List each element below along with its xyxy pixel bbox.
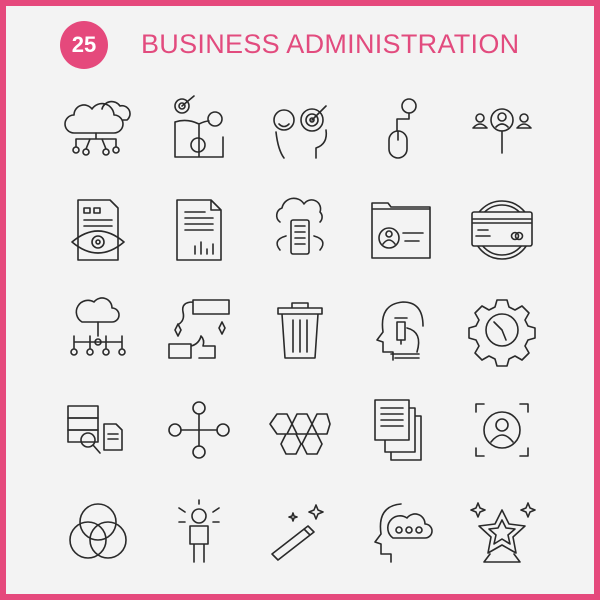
icon: people network: [169, 402, 229, 458]
icon: gear clock: [469, 300, 535, 366]
icon: report doc: [177, 200, 221, 260]
badge: 25: [60, 21, 108, 69]
icon: server search: [68, 406, 122, 453]
icon: hexagons: [270, 414, 330, 454]
icon: cloud phone: [277, 198, 323, 254]
icon: mouse coin: [389, 99, 416, 158]
icon: cloud hierarchy: [71, 298, 125, 355]
icon: head target: [274, 106, 326, 158]
icon: folder contact: [372, 203, 430, 258]
icon: book target: [175, 96, 223, 157]
icon: head cloud: [375, 504, 432, 562]
icon: document eye: [72, 200, 124, 260]
icon: thumbs up down: [169, 300, 229, 358]
icon: credit card: [472, 201, 532, 259]
icon: person idea: [179, 500, 219, 562]
icon: trash bin: [278, 303, 322, 358]
icon: magic wand: [272, 505, 323, 560]
title: BUSINESS ADMINISTRATION: [141, 29, 519, 59]
icon: head microscope: [377, 302, 423, 360]
icon: cloud network: [65, 102, 130, 155]
icon: documents: [375, 400, 421, 460]
icon: venn circles: [70, 504, 126, 558]
icon: star: [471, 503, 535, 562]
icon: search people: [473, 109, 531, 153]
badge: 25: 25: [72, 32, 96, 57]
icon: profile frame: [476, 404, 528, 456]
